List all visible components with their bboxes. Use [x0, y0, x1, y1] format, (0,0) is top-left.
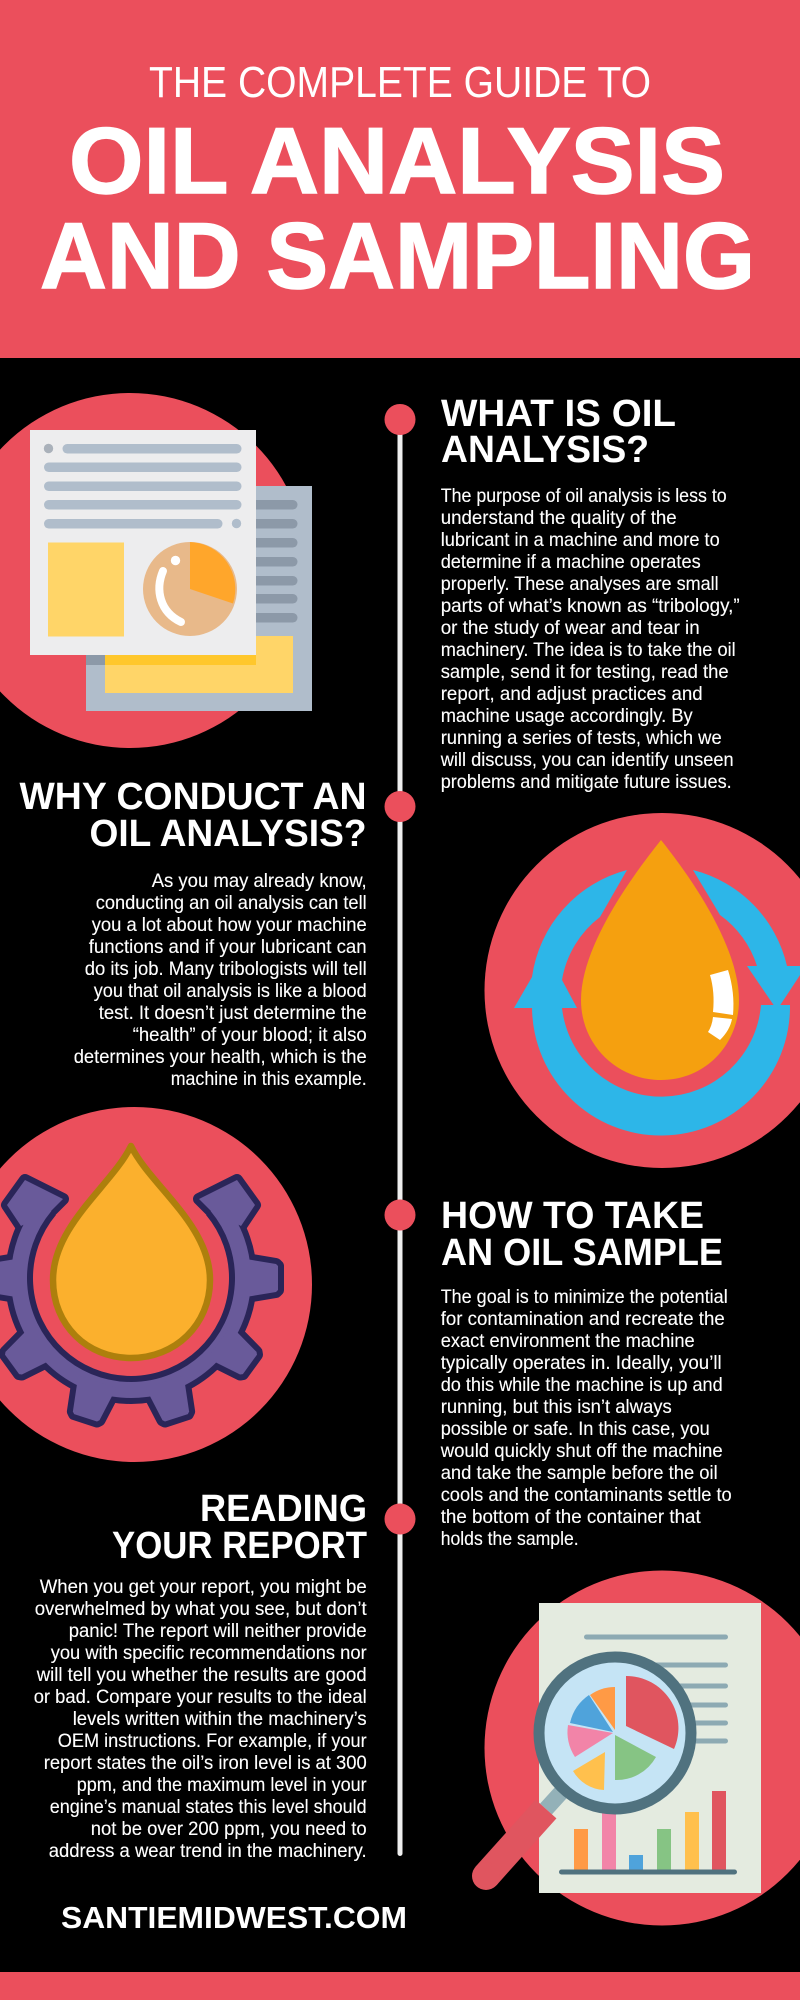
- heading: reading your report: READING: [200, 1488, 367, 1530]
- text block: how to take an oil sample: the bottom of the container that: [441, 1506, 701, 1528]
- text block: how to take an oil sample: typically operates in. Ideally, you’ll: [441, 1352, 722, 1374]
- gear body: [0, 1180, 278, 1424]
- timeline: [384, 404, 416, 1856]
- text block: why conduct an oil analysis: you a lot about how your machine: [92, 914, 367, 936]
- title: and sampling: AND SAMPLING: [40, 203, 755, 308]
- text block: what is oil analysis: report, and adjust practices and: [441, 683, 703, 705]
- text block: what is oil analysis: properly. These analyses are small: [441, 573, 719, 595]
- pie chart in lens: [567, 1676, 678, 1790]
- heading: how to take an oil sample: AN OIL SAMPLE: [441, 1232, 723, 1274]
- text block: reading your report: When you get your report, you might be: [40, 1576, 367, 1598]
- text block: how to take an oil sample: [440, 1286, 732, 1550]
- text block: how to take an oil sample: for contamination and recreate the: [441, 1308, 725, 1330]
- text block: reading your report: ppm, and the maximum level in your: [77, 1774, 367, 1796]
- text block: why conduct an oil analysis: conducting an oil analysis can tell: [96, 892, 367, 914]
- text block: reading your report: not be over 200 ppm, you need to: [91, 1818, 367, 1840]
- heading: what is oil analysis: WHAT IS OIL: [441, 393, 676, 435]
- text block: what is oil analysis: running a series of tests, which we: [441, 727, 722, 749]
- text block: reading your report: engine’s manual states this level should: [50, 1796, 367, 1818]
- report page: [539, 1603, 761, 1893]
- text block: what is oil analysis: sample, send it for testing, read the: [441, 661, 729, 683]
- text block: how to take an oil sample: do this while the machine is up and: [441, 1374, 723, 1396]
- text block: what is oil analysis: understand the quality of the: [441, 507, 677, 529]
- text block: what is oil analysis: The purpose of oil analysis is less to: [441, 485, 727, 507]
- section: why conduct an oil analysis: [20, 776, 367, 1090]
- text block: how to take an oil sample: holds the sample.: [441, 1528, 579, 1550]
- website url: SANTIEMIDWEST.COM: [61, 1900, 407, 1935]
- icon: oil drop with circular arrows: [484, 813, 800, 1168]
- heading: why conduct an oil analysis: [20, 776, 366, 855]
- heading: why conduct an oil analysis: OIL ANALYSIS?: [90, 813, 366, 855]
- section: reading your report: [34, 1488, 367, 1862]
- text block: what is oil analysis: determine if a machine operates: [441, 551, 701, 573]
- text block: reading your report: overwhelmed by what you see, but don’t: [35, 1598, 367, 1620]
- text block: how to take an oil sample: cools and the contaminants settle to: [441, 1484, 732, 1506]
- text block: reading your report: levels written within the machinery’s: [73, 1708, 367, 1730]
- text block: reading your report: panic! The report will neither provide: [69, 1620, 367, 1642]
- heading: reading your report: YOUR REPORT: [112, 1525, 367, 1567]
- text block: reading your report: report states the oil’s iron level is at 300: [44, 1752, 367, 1774]
- footer band: [0, 1972, 800, 2000]
- text block: what is oil analysis: problems and mitigate future issues.: [441, 771, 732, 793]
- icon: report with magnifying glass: [472, 1570, 800, 1926]
- text block: reading your report: [34, 1576, 367, 1862]
- report text lines: [584, 1634, 728, 1744]
- text block: what is oil analysis: parts of what’s known as “tribology,”: [441, 595, 740, 617]
- magnifier lens: [539, 1657, 691, 1809]
- heading: why conduct an oil analysis: WHY CONDUCT AN: [20, 776, 366, 818]
- title: kicker: THE COMPLETE GUIDE TO: [149, 58, 651, 107]
- text block: how to take an oil sample: and take the sample before the oil: [441, 1462, 718, 1484]
- text block: how to take an oil sample: The goal is to minimize the potential: [441, 1286, 728, 1308]
- text block: why conduct an oil analysis: functions and if your lubricant can: [89, 936, 367, 958]
- heading: how to take an oil sample: HOW TO TAKE: [441, 1195, 704, 1237]
- text block: why conduct an oil analysis: “health” of your blood; it also: [133, 1024, 367, 1046]
- magnifier handle: [472, 1787, 566, 1890]
- icon: report pages with pie chart: [0, 393, 312, 748]
- heading: what is oil analysis: ANALYSIS?: [441, 429, 649, 471]
- heading: reading your report: [112, 1488, 367, 1567]
- text block: why conduct an oil analysis: [74, 870, 367, 1090]
- text block: why conduct an oil analysis: determines your health, which is the: [74, 1046, 367, 1068]
- text block: why conduct an oil analysis: you that oil analysis is like a blood: [94, 980, 367, 1002]
- text block: why conduct an oil analysis: machine in this example.: [171, 1068, 367, 1090]
- oil drop: [53, 1146, 210, 1358]
- text block: why conduct an oil analysis: As you may already know,: [152, 870, 367, 892]
- text block: how to take an oil sample: running, but this isn’t always: [441, 1396, 672, 1418]
- title: oil analysis: OIL ANALYSIS: [69, 108, 725, 213]
- heading: how to take an oil sample: [441, 1195, 723, 1274]
- text block: reading your report: will tell you whether the results are good: [36, 1664, 367, 1686]
- text block: reading your report: OEM instructions. For example, if your: [58, 1730, 367, 1752]
- text block: how to take an oil sample: exact environment the machine: [441, 1330, 695, 1352]
- text block: what is oil analysis: lubricant in a machine and more to: [441, 529, 720, 551]
- gear outline: [0, 1180, 278, 1424]
- text block: how to take an oil sample: possible or safe. In this case, you: [441, 1418, 710, 1440]
- section: what is oil analysis: [440, 393, 740, 793]
- text block: reading your report: or bad. Compare your results to the ideal: [34, 1686, 367, 1708]
- text block: why conduct an oil analysis: test. It doesn’t just determine the: [99, 1002, 367, 1024]
- text block: what is oil analysis: or the study of wear and tear in: [441, 617, 700, 639]
- icon: gear with oil drop: [0, 1107, 312, 1462]
- text block: what is oil analysis: will discuss, you can identify unseen: [440, 749, 734, 771]
- text block: how to take an oil sample: would quickly shut off the machine: [440, 1440, 723, 1462]
- text block: reading your report: you with specific recommendations nor: [51, 1642, 367, 1664]
- text block: what is oil analysis: machinery. The idea is to take the oil: [441, 639, 736, 661]
- text block: why conduct an oil analysis: do its job. Many tribologists will tell: [85, 958, 367, 980]
- text block: what is oil analysis: machine usage accordingly. By: [441, 705, 693, 727]
- heading: what is oil analysis: [441, 393, 676, 471]
- text block: what is oil analysis: [440, 485, 740, 793]
- text block: reading your report: address a wear trend in the machinery.: [49, 1840, 367, 1862]
- bar chart: [559, 1790, 737, 1874]
- header banner: [0, 0, 800, 358]
- section: how to take an oil sample: [440, 1195, 732, 1550]
